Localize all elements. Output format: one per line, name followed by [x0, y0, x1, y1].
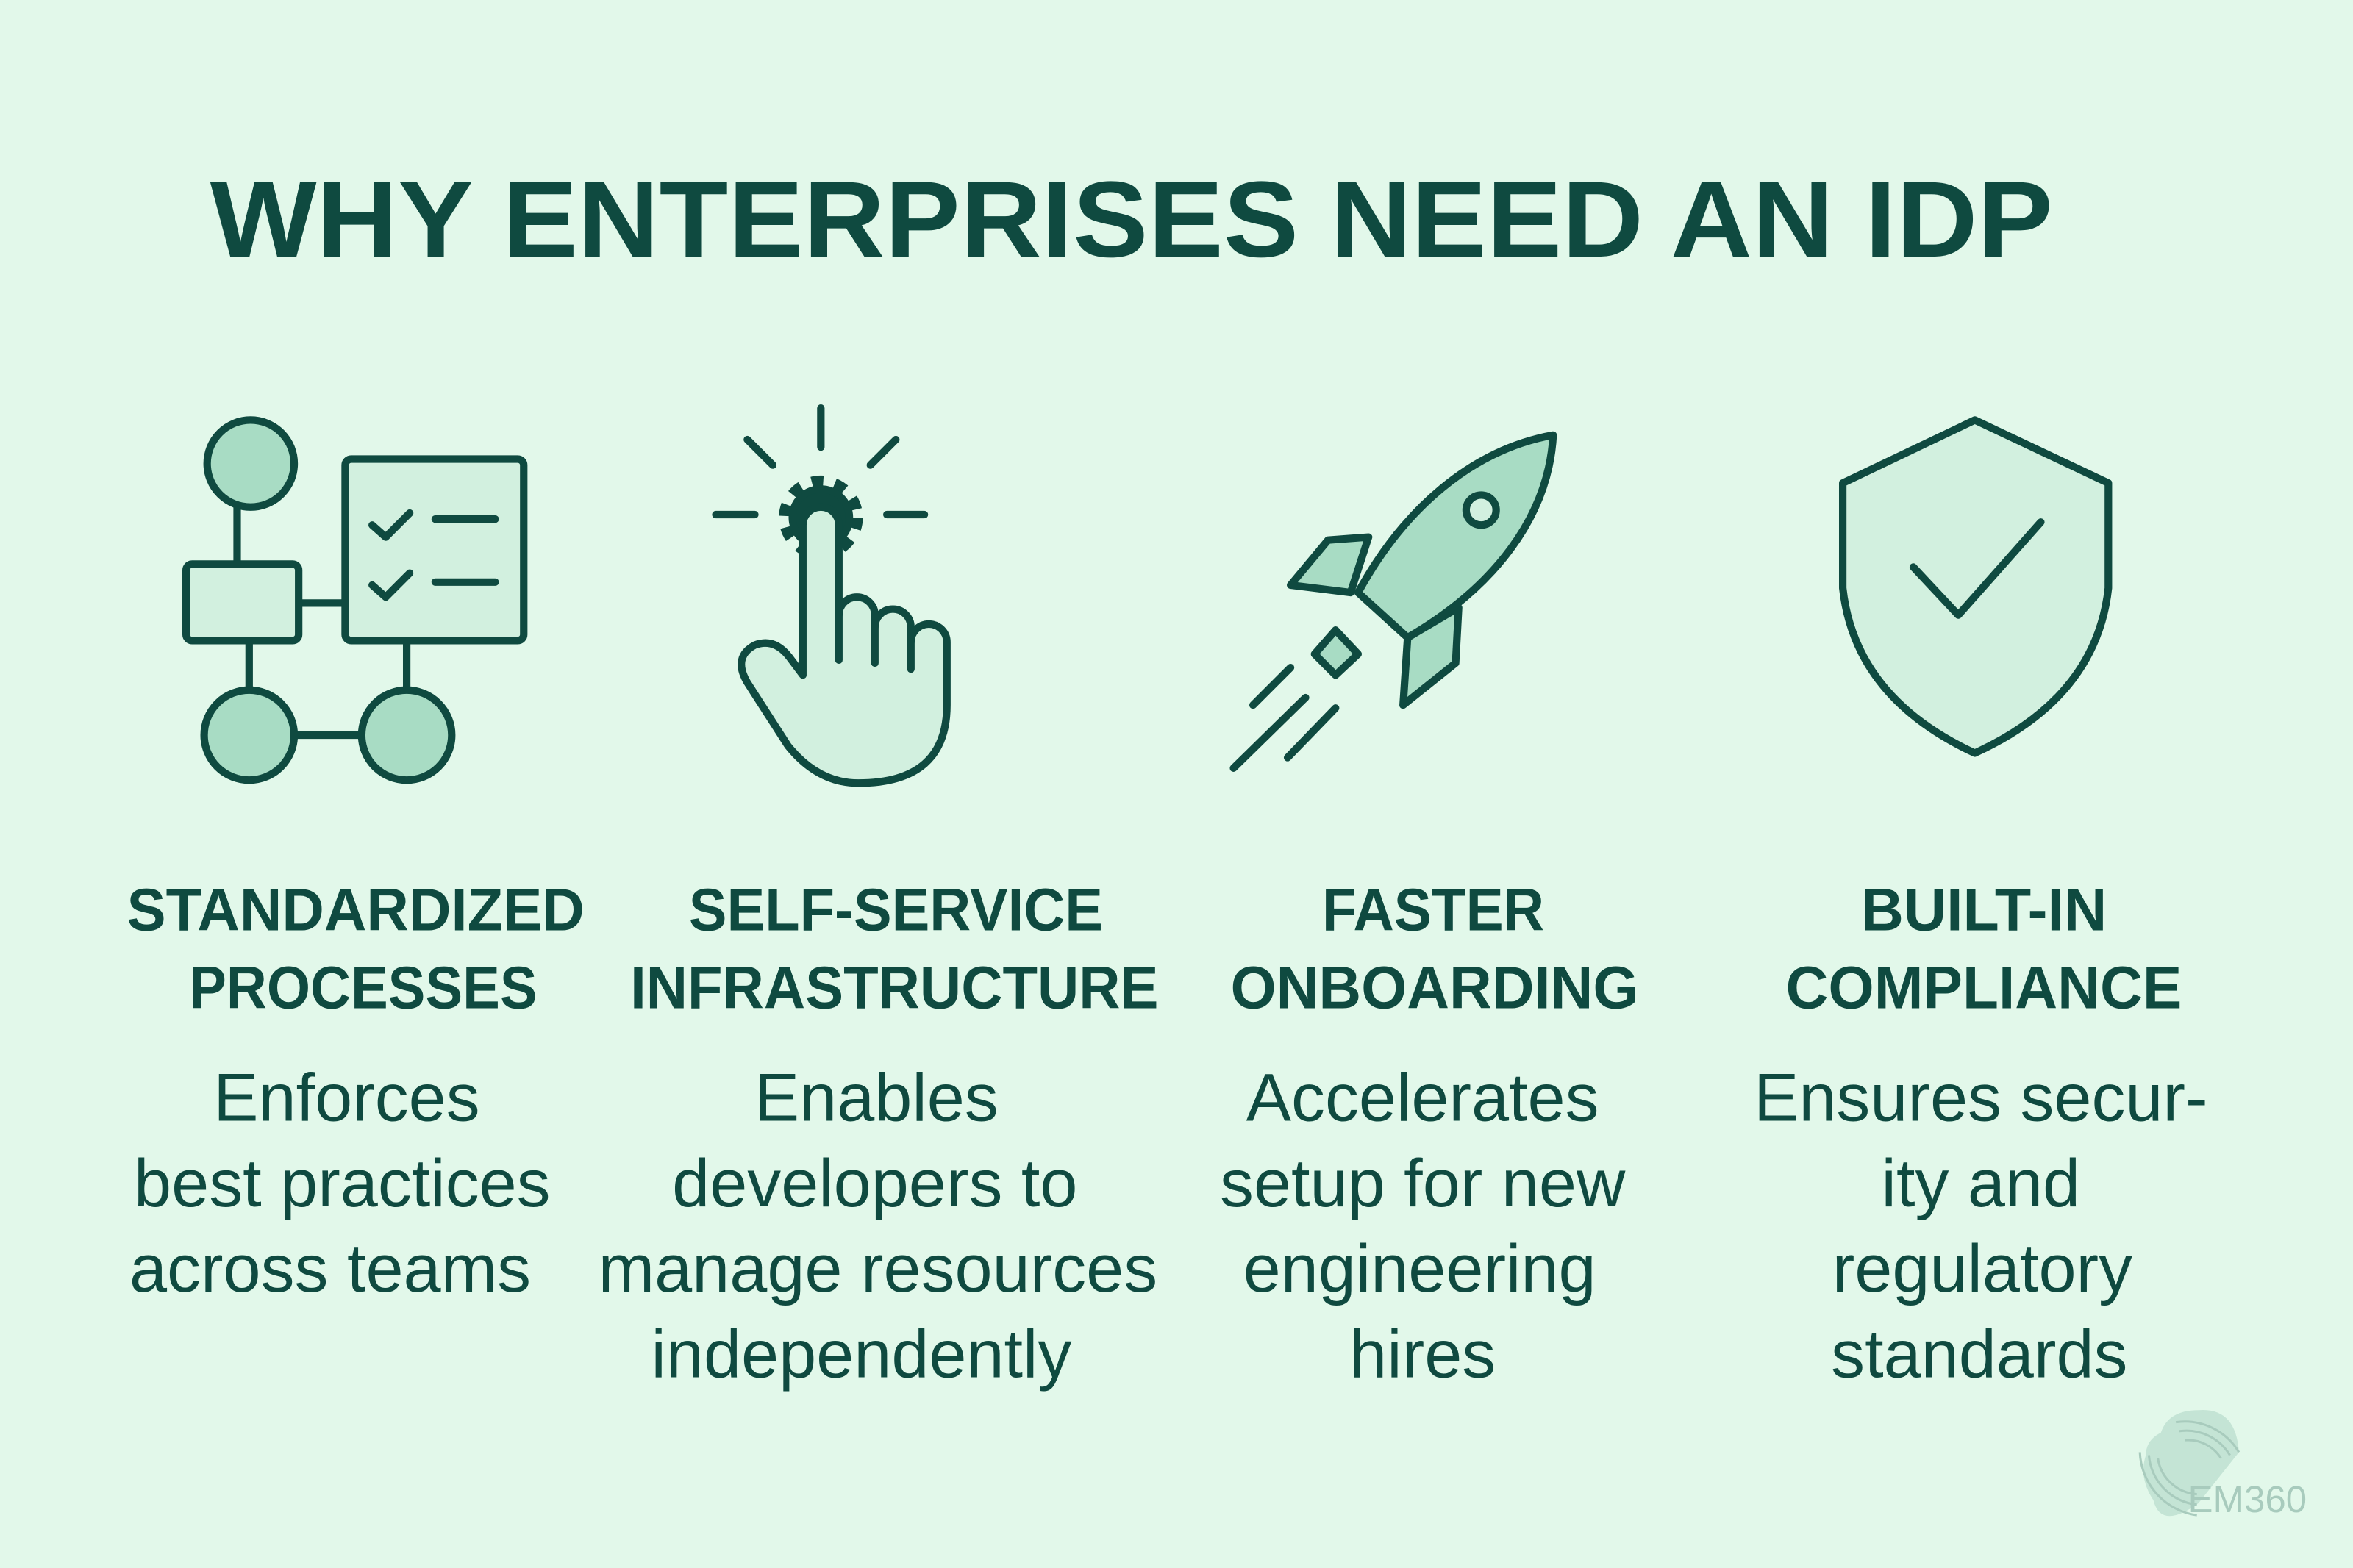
text: onboarding body: hires — [1349, 1317, 1496, 1392]
text: standardized body — [129, 1060, 551, 1306]
logo: EM360 — [2140, 1410, 2307, 1520]
text: self-service body: Enables — [754, 1060, 999, 1135]
icon: process flowchart — [186, 420, 524, 780]
heading: self-service infrastructure: INFRASTRUCTURE — [630, 954, 1159, 1021]
text: compliance body: ity and — [1882, 1146, 2080, 1221]
heading: built-in compliance: COMPLIANCE — [1786, 954, 2182, 1021]
text: onboarding body — [1220, 1060, 1626, 1392]
heading: standardized processes — [126, 876, 585, 1021]
text: standardized body: best practices — [134, 1146, 551, 1221]
text: standardized body: across teams — [129, 1231, 531, 1306]
icon: rocket — [1234, 435, 1553, 768]
text: onboarding body: Accelerates — [1246, 1060, 1599, 1135]
heading: faster onboarding — [1230, 876, 1639, 1021]
text: compliance body — [1754, 1060, 2208, 1392]
text: compliance body: standards — [1831, 1317, 2127, 1392]
icon: hand with gear — [715, 408, 947, 783]
heading: built-in compliance: BUILT-IN — [1861, 876, 2107, 943]
heading: faster onboarding: ONBOARDING — [1230, 954, 1639, 1021]
text: self-service body: manage resources — [599, 1231, 1157, 1306]
heading: self-service infrastructure: SELF-SERVICE — [689, 876, 1103, 943]
text: self-service body: independently — [651, 1317, 1071, 1392]
heading: built-in compliance — [1786, 876, 2182, 1021]
text: onboarding body: engineering — [1243, 1231, 1596, 1306]
logo: EM360: EM360 — [2188, 1478, 2307, 1520]
icon: shield check — [1843, 420, 2108, 753]
text: compliance body: regulatory — [1832, 1231, 2132, 1306]
heading: self-service infrastructure — [630, 876, 1159, 1021]
heading: standardized processes: STANDARDIZED — [126, 876, 585, 943]
title: WHY ENTERPRISES NEED AN IDP — [210, 160, 2053, 280]
heading: standardized processes: PROCESSES — [189, 954, 538, 1021]
text: self-service body: developers to — [672, 1146, 1077, 1221]
text: onboarding body: setup for new — [1220, 1146, 1626, 1221]
text: standardized body: Enforces — [213, 1060, 480, 1135]
heading: faster onboarding: FASTER — [1322, 876, 1544, 943]
text: self-service body — [599, 1060, 1157, 1392]
text: compliance body: Ensures secur- — [1754, 1060, 2208, 1135]
